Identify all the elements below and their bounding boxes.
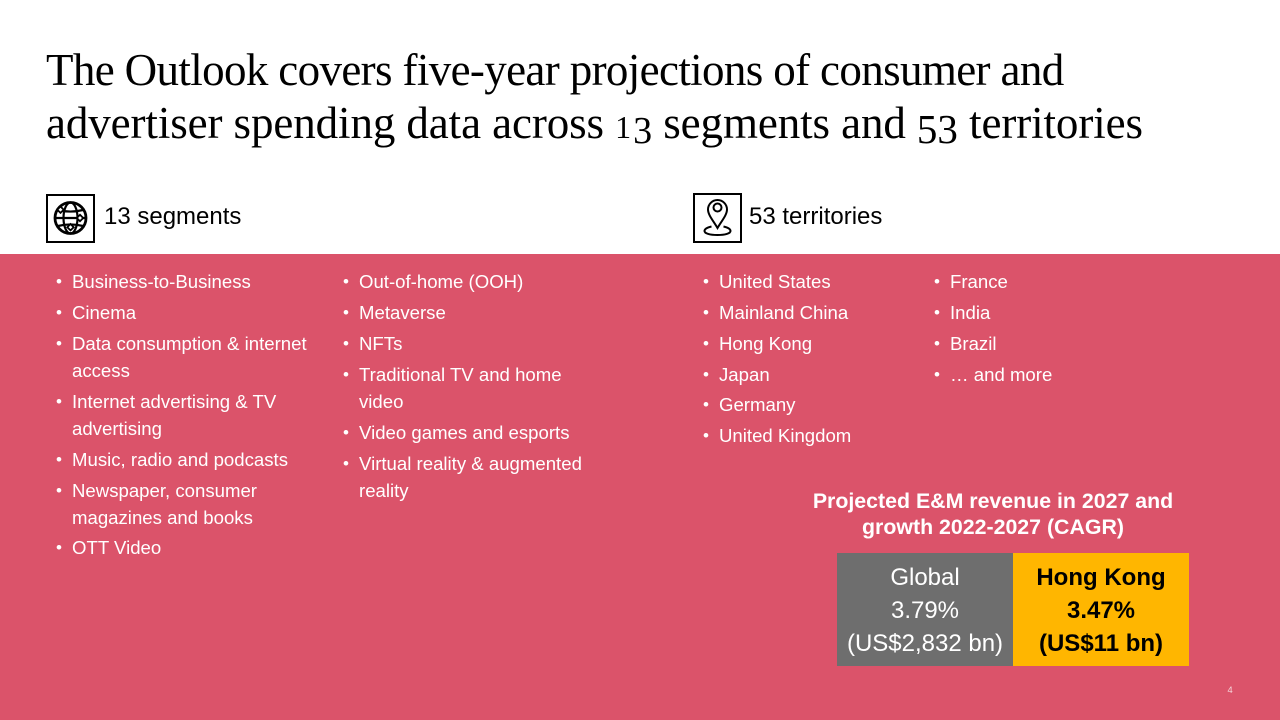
title — [46, 44, 1143, 152]
list: segments column 2: video — [359, 391, 403, 412]
list: segments column 2: Video games and esports — [359, 422, 570, 443]
title: advertiser spending data across 13 segments and 53 territories — [46, 98, 1143, 152]
list: segments column 2: • — [343, 303, 349, 322]
list: territories column 2: • — [934, 365, 940, 384]
list: territories column 2: • — [934, 272, 940, 291]
list: territories column 2: … and more — [950, 364, 1052, 385]
heading: 53 territories: 53 territories — [749, 202, 882, 230]
list: territories column 1: • — [703, 334, 709, 353]
list: segments column 1: Internet advertising & TV — [72, 391, 276, 412]
cell: Global: Global — [890, 564, 960, 591]
list: territories column 2 — [934, 271, 1052, 385]
list: territories column 1: Mainland China — [719, 302, 848, 323]
list: territories column 1: United Kingdom — [719, 425, 851, 446]
list: territories column 2: • — [934, 334, 940, 353]
list: segments column 1: Business-to-Business — [72, 271, 251, 292]
list: territories column 2: Brazil — [950, 333, 996, 354]
list: segments column 2 — [343, 271, 582, 501]
list: segments column 2: NFTs — [359, 333, 402, 354]
list: segments column 2: reality — [359, 480, 409, 501]
list: segments column 2: • — [343, 454, 349, 473]
icon: location pin — [693, 193, 742, 243]
cell: Hong Kong: (US$11 bn) — [1039, 630, 1163, 657]
list: territories column 2: • — [934, 303, 940, 322]
cell: Global: (US$2,832 bn) — [847, 630, 1003, 657]
cell: Hong Kong: 3.47% — [1067, 597, 1135, 624]
list: segments column 2: Out-of-home (OOH) — [359, 271, 523, 292]
panel: red background — [0, 254, 1280, 720]
page number: 4 — [1228, 685, 1233, 695]
list: segments column 2: Virtual reality & augmented — [359, 453, 582, 474]
list: territories column 1: Germany — [719, 394, 795, 415]
list: territories column 1: • — [703, 365, 709, 384]
list: segments column 2: Traditional TV and home — [359, 364, 562, 385]
list: segments column 2: • — [343, 272, 349, 291]
list: segments column 2: • — [343, 365, 349, 384]
list: segments column 1: • — [56, 334, 62, 353]
list: segments column 1: magazines and books — [72, 507, 253, 528]
list: segments column 1: • — [56, 481, 62, 500]
list: territories column 1: • — [703, 272, 709, 291]
list: segments column 1: Newspaper, consumer — [72, 480, 257, 501]
cell: Hong Kong: Hong Kong — [1036, 564, 1166, 591]
list: segments column 1: advertising — [72, 418, 162, 439]
list: segments column 1: Music, radio and podcasts — [72, 449, 288, 470]
list: territories column 1: Japan — [719, 364, 770, 385]
heading: 13 segments: 13 segments — [104, 202, 241, 230]
list: territories column 1 — [703, 271, 851, 446]
cell: Global: 3.79% — [891, 597, 959, 624]
chart heading: Projected E&M revenue in 2027 and — [813, 489, 1173, 513]
list: segments column 1: • — [56, 450, 62, 469]
list: segments column 1: • — [56, 272, 62, 291]
list: territories column 1: • — [703, 303, 709, 322]
list: segments column 1: Cinema — [72, 302, 136, 323]
list: territories column 2: India — [950, 302, 990, 323]
list: segments column 1: • — [56, 303, 62, 322]
cell: Global — [837, 553, 1013, 666]
list: segments column 1: OTT Video — [72, 537, 161, 558]
list: segments column 2: • — [343, 423, 349, 442]
cell: Hong Kong — [1013, 553, 1189, 666]
list: segments column 2: • — [343, 334, 349, 353]
list: segments column 1: Data consumption & internet — [72, 333, 307, 354]
list: segments column 1 — [56, 271, 307, 558]
chart heading: growth 2022-2027 (CAGR) — [862, 515, 1124, 539]
list: territories column 1: Hong Kong — [719, 333, 812, 354]
list: segments column 1: • — [56, 392, 62, 411]
chart heading — [813, 489, 1173, 539]
list: territories column 1: United States — [719, 271, 831, 292]
list: segments column 1: • — [56, 538, 62, 557]
list: territories column 1: • — [703, 395, 709, 414]
list: territories column 2: France — [950, 271, 1008, 292]
list: segments column 1: access — [72, 360, 130, 381]
icon: globe — [46, 194, 95, 243]
list: territories column 1: • — [703, 426, 709, 445]
title: The Outlook covers five-year projections of consumer and — [46, 44, 1064, 94]
list: segments column 2: Metaverse — [359, 302, 446, 323]
